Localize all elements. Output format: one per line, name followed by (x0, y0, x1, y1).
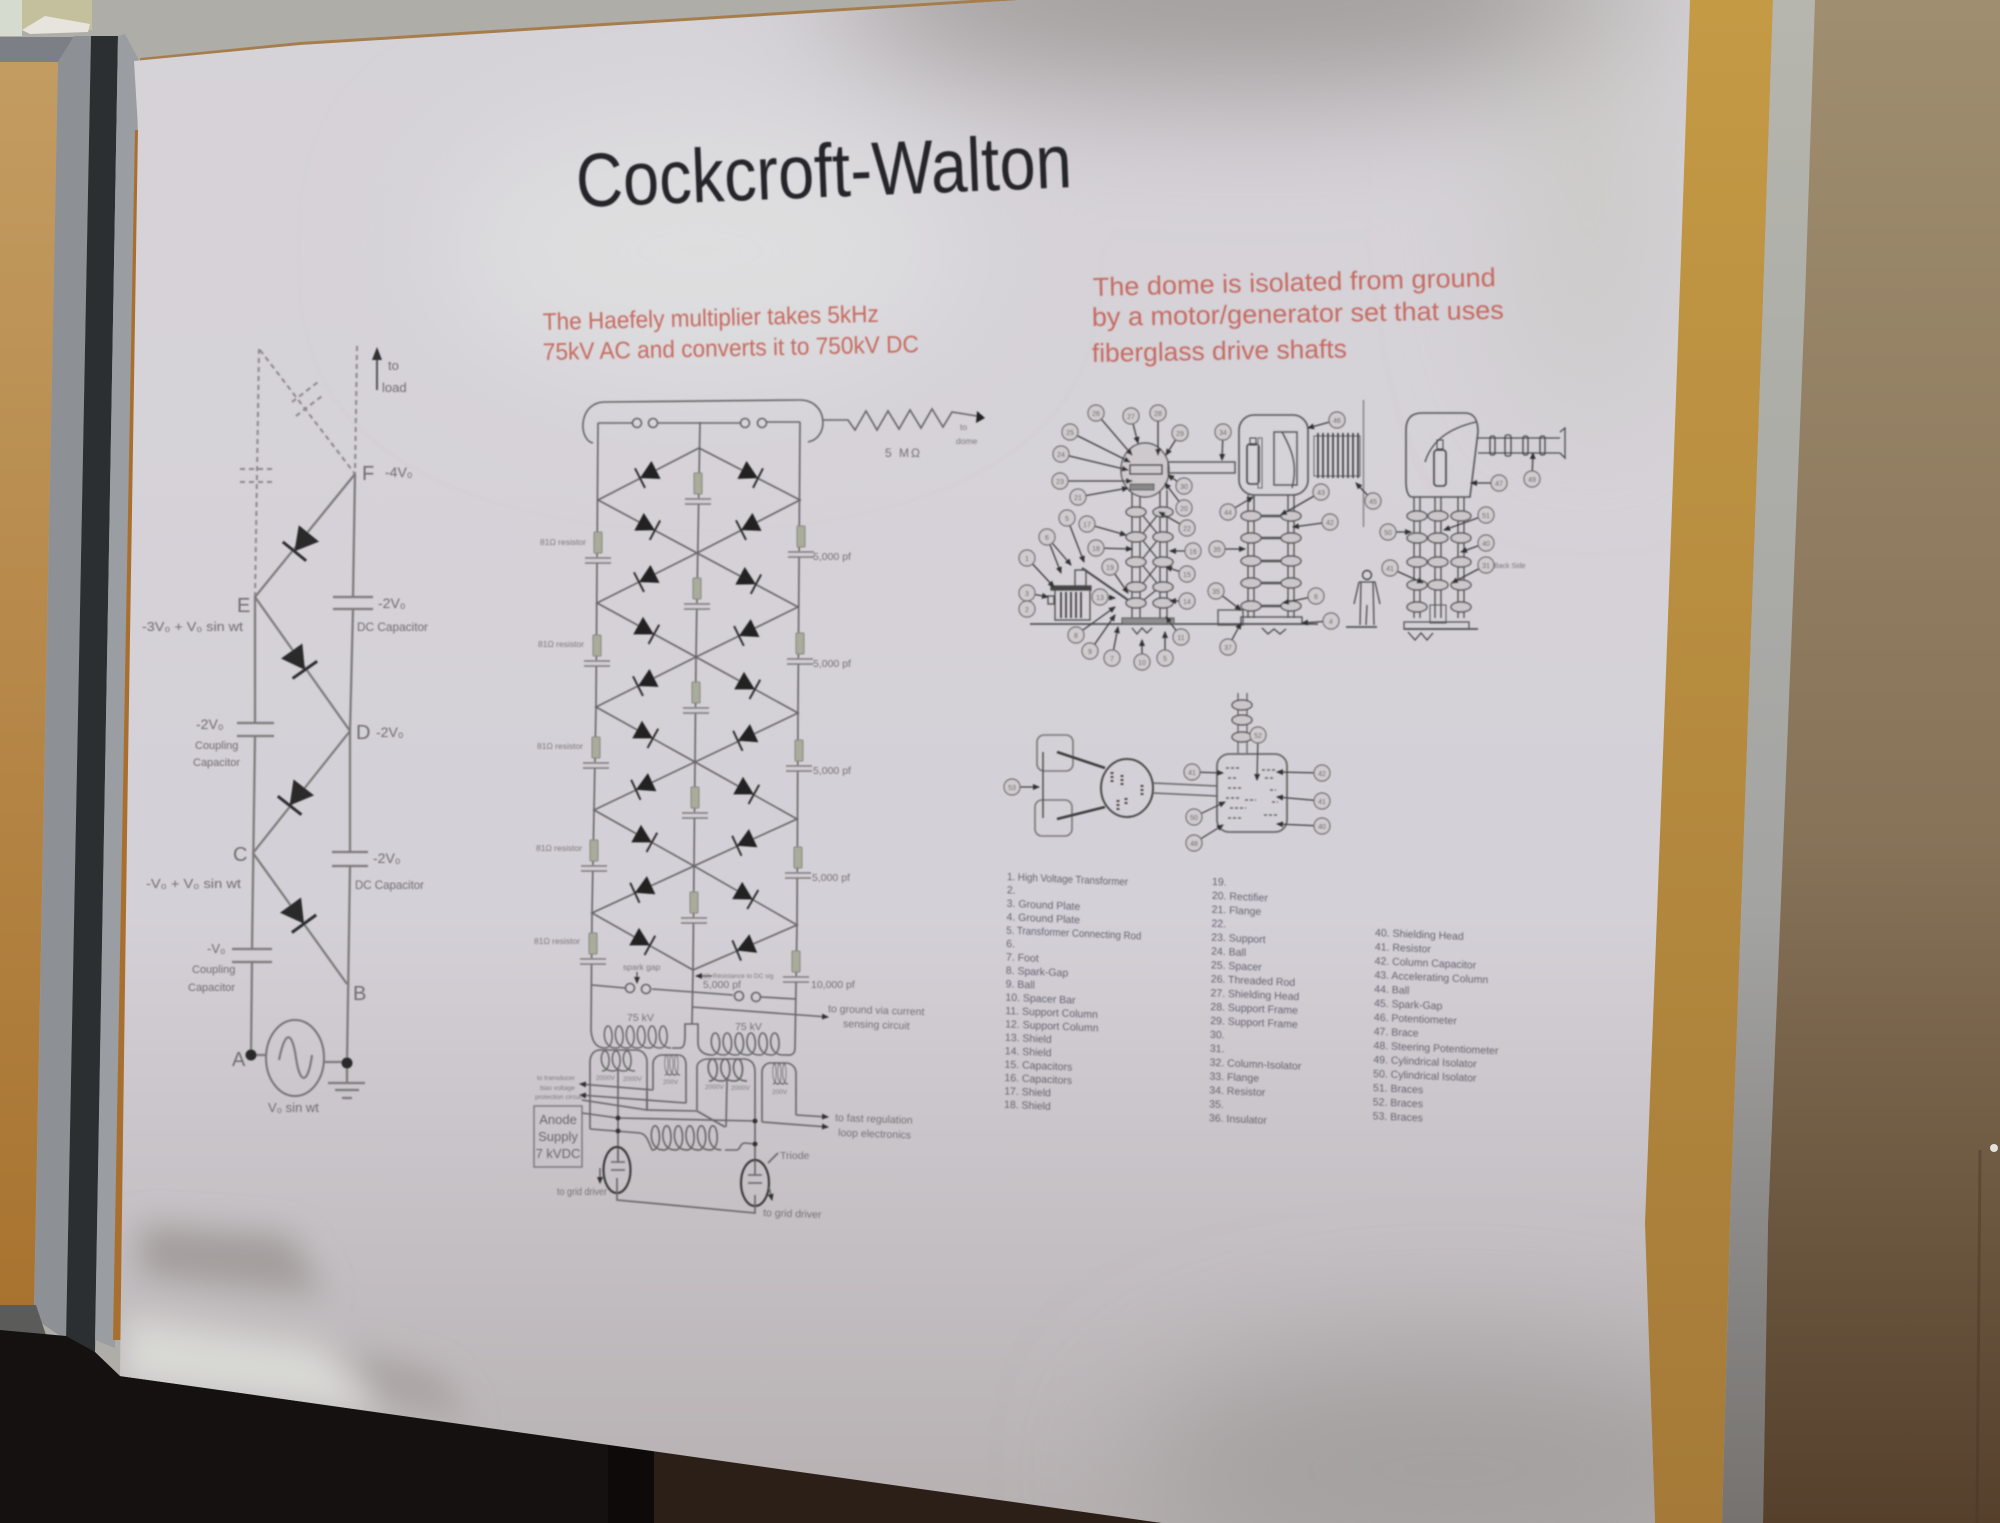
numbered callouts: 47 (1495, 481, 1503, 488)
plan callouts: 53 (1008, 785, 1016, 792)
transformer windings: 2000V (596, 1075, 615, 1082)
spark gap row: (2) Résistance to DC sig (703, 973, 774, 980)
component value labels: 81Ω resistor (538, 639, 584, 649)
spark gap row: 5,000 pf (703, 979, 741, 991)
numbered callouts: 25 (1066, 430, 1074, 437)
dome electrode and output resistor: 5 MΩ (885, 446, 922, 460)
legend: parts list column 2: 30. (1210, 1029, 1225, 1042)
numbered callouts (1019, 405, 1540, 670)
legend: parts list column 2: 19. (1212, 876, 1227, 889)
numbered callouts: 24 (1057, 452, 1065, 459)
legend: parts list column 2: 24. Ball (1211, 946, 1246, 959)
ground sense wire: sensing circuit (843, 1018, 910, 1032)
legend: parts list column 3: 44. Ball (1374, 983, 1409, 997)
numbered callouts: 26 (1092, 411, 1100, 418)
numbered callouts: 35 (1213, 547, 1221, 554)
ladder labels: -2V₀ (376, 724, 404, 740)
right column and dome with insulator: Back Side (1494, 563, 1526, 570)
ladder labels: -V₀ (207, 941, 225, 956)
legend: parts list column 1 (1004, 871, 1142, 1117)
triodes (557, 1147, 822, 1221)
numbered callouts: 5 (1163, 656, 1167, 663)
legend: parts list column 3: 42. Column Capacitor (1375, 955, 1477, 972)
ladder labels: Coupling (195, 740, 238, 752)
dome electrode and output resistor: to (960, 422, 967, 432)
transformer windings: 75 kV (627, 1012, 654, 1024)
ladder labels: DC Capacitor (355, 878, 424, 892)
ladder labels (142, 358, 428, 1115)
ladder labels: B (353, 983, 366, 1005)
numbered callouts: 18 (1092, 546, 1100, 553)
ladder labels: DC Capacitor (357, 620, 428, 634)
legend: parts list column 1: 9. Ball (1006, 978, 1035, 991)
text block: Haefely multiplier note: 75kV AC and converts it to 750kV DC (543, 331, 919, 366)
numbered callouts: 2 (1025, 607, 1029, 614)
component value labels: 81Ω resistor (540, 537, 586, 547)
generator box with column (1217, 693, 1287, 832)
numbered callouts: 45 (1369, 499, 1377, 506)
legend: parts list column 3: 52. Braces (1373, 1096, 1423, 1110)
numbered callouts: 51 (1482, 513, 1490, 520)
numbered callouts: 40 (1482, 541, 1490, 548)
ladder labels: -4V₀ (385, 464, 413, 480)
legend: parts list column 3: 47. Brace (1374, 1026, 1419, 1040)
legend: parts list column 2: 20. Rectifier (1212, 890, 1268, 904)
legend: parts list column 1: 15. Capacitors (1005, 1059, 1072, 1074)
numbered callouts: 27 (1127, 414, 1135, 421)
text block: dome isolation note: by a motor/generator set that uses (1092, 295, 1504, 332)
transformer windings: 2000V (731, 1085, 750, 1092)
middle column and dome (1218, 415, 1308, 634)
legend: parts list column 1: 16. Capacitors (1004, 1072, 1072, 1087)
numbered callouts: 44 (1224, 510, 1232, 517)
numbered callouts: 4 (1329, 619, 1333, 626)
ladder labels: Capacitor (193, 757, 240, 769)
numbered callouts: 14 (1183, 599, 1191, 606)
legend: parts list column 1: 2. (1007, 884, 1016, 897)
component value labels: 5,000 pf (813, 658, 851, 670)
transformer windings: 75 kV (735, 1021, 762, 1033)
plan callouts: 40 (1318, 824, 1326, 831)
legend: parts list column 2: 29. Support Frame (1210, 1015, 1298, 1031)
legend: parts list column 1: 6. (1006, 938, 1015, 950)
numbered callouts: 31 (1482, 563, 1490, 570)
ladder labels: F (362, 463, 374, 485)
ladder labels: Capacitor (188, 982, 235, 994)
diode stack (629, 460, 763, 961)
legend: parts list column 3: 43. Accelerating Column (1374, 969, 1488, 986)
legend: parts list column 3: 53. Braces (1373, 1110, 1423, 1125)
ladder labels: C (233, 844, 247, 866)
legend: parts list column 2: 23. Support (1211, 932, 1266, 946)
numbered callouts: 17 (1083, 522, 1091, 529)
legend: parts list column 2: 26. Threaded Rod (1211, 973, 1295, 989)
rails and cross links (591, 422, 800, 1047)
component value labels: 81Ω resistor (536, 843, 582, 853)
legend: parts list column 2: 22. (1211, 918, 1226, 930)
legend: parts list column 1: 13. Shield (1005, 1032, 1052, 1046)
diodes (278, 524, 321, 933)
text block: dome isolation note: fiberglass drive shafts (1092, 334, 1347, 368)
capacitors (232, 597, 373, 962)
anode supply box: Anode (539, 1112, 577, 1127)
plan callouts: 50 (1190, 815, 1198, 822)
numbered callouts: 49 (1528, 477, 1536, 484)
triodes: to grid driver (763, 1207, 822, 1221)
ground sense wire (692, 1003, 925, 1032)
ladder labels: D (356, 722, 370, 744)
text block: dome isolation note (1092, 262, 1504, 368)
numbered callouts: 46 (1333, 418, 1341, 425)
spark gap row (592, 962, 796, 1002)
numbered callouts: 1 (1025, 556, 1029, 563)
legend: parts list column 2: 21. Flange (1212, 904, 1262, 918)
legend: parts list column 2: 31. (1210, 1043, 1225, 1055)
numbered callouts: 5 (1065, 516, 1069, 523)
legend: parts list column 2: 33. Flange (1209, 1071, 1259, 1085)
legend: parts list column 3: 51. Braces (1373, 1082, 1423, 1096)
numbered callouts: 22 (1183, 526, 1191, 533)
numbered callouts: 13 (1096, 595, 1104, 602)
ladder labels: V₀ sin wt (268, 1100, 319, 1115)
chart: voltage multiplier ladder schematic (142, 346, 428, 1115)
motor boxes and drive (1035, 735, 1217, 836)
bias and regulation wiring: bias voltage (540, 1085, 575, 1092)
plan callouts: 42 (1318, 771, 1326, 778)
plan callouts: 41 (1188, 770, 1196, 777)
legend: parts list column 2: 27. Shielding Head (1211, 987, 1300, 1003)
human figure for scale (1354, 570, 1380, 625)
dome electrode and output resistor: dome (956, 436, 978, 446)
ground sense wire: to ground via current (828, 1003, 925, 1018)
bias and regulation wiring: protection circuit (535, 1094, 583, 1101)
legend: parts list column 1: 8. Spark-Gap (1006, 965, 1068, 980)
legend: parts list column 2: 32. Column-Isolator (1210, 1057, 1302, 1073)
floor lines (1030, 624, 1478, 629)
leader arrows (1027, 413, 1533, 662)
legend: parts list column 3: 46. Potentiometer (1374, 1012, 1457, 1027)
bias and regulation wiring (535, 1075, 913, 1150)
text block: Haefely multiplier note (542, 301, 919, 366)
legend: parts list column 3: 50. Cylindrical Isolator (1373, 1068, 1477, 1085)
numbered callouts: 20 (1180, 506, 1188, 513)
numbered callouts: 34 (1219, 430, 1227, 437)
numbered callouts: 6 (1314, 594, 1318, 601)
numbered callouts: 15 (1183, 572, 1191, 579)
spark gap row: spark gap (623, 962, 661, 972)
AC source and ground (246, 1020, 365, 1098)
dome electrode and output resistor (583, 400, 985, 460)
text block: Haefely multiplier note: The Haefely multiplier takes 5kHz (542, 301, 879, 336)
numbered callouts: 16 (1189, 549, 1197, 556)
legend: parts list column 2: 34. Resistor (1209, 1085, 1266, 1099)
legend: parts list column 3: 45. Spark-Gap (1374, 998, 1443, 1013)
legend: parts list column 1: 1. High Voltage Transformer (1007, 871, 1129, 888)
bias and regulation wiring: loop electronics (838, 1127, 911, 1142)
diagram: accelerator cutaway elevations (1019, 400, 1565, 670)
arrow: to load (372, 347, 382, 390)
ladder labels: -2V₀ (378, 595, 406, 611)
legend: parts list column 2 (1209, 876, 1304, 1128)
finned drive shaft (1314, 400, 1364, 527)
numbered callouts: 35 (1212, 589, 1220, 596)
resistor-capacitor pairs (580, 473, 814, 982)
legend: parts list column 2: 25. Spacer (1211, 959, 1262, 974)
numbered callouts: 28 (1154, 411, 1162, 418)
component value labels: 5,000 pf (813, 765, 851, 777)
legend: parts list column 1: 11. Support Column (1005, 1005, 1098, 1021)
dashed next stage (240, 346, 357, 597)
numbered callouts: 30 (1180, 484, 1188, 491)
anode supply box: 7 kVDC (536, 1146, 580, 1161)
component value labels: 5,000 pf (812, 872, 850, 884)
numbered callouts: 23 (1056, 479, 1064, 486)
numbered callouts: 11 (1177, 635, 1185, 642)
transformer windings: 2000V (623, 1076, 642, 1083)
legend: parts list column 1: 7. Foot (1006, 951, 1039, 965)
plan callouts: 48 (1190, 841, 1198, 848)
anode supply box (534, 1106, 582, 1167)
component value labels: 5,000 pf (813, 551, 851, 563)
legend: parts list column 1: 12. Support Column (1005, 1018, 1099, 1035)
plan callouts: 52 (1254, 733, 1262, 740)
transformer windings: 2000V (705, 1084, 724, 1091)
legend: parts list column 2: 35. (1209, 1098, 1224, 1111)
legend: parts list column 2: 28. Support Frame (1210, 1001, 1298, 1017)
numbered callouts: 3 (1025, 591, 1029, 598)
ladder labels: E (237, 595, 250, 617)
transformer windings (590, 1012, 796, 1160)
legend: parts list column 1: 4. Ground Plate (1006, 911, 1080, 926)
numbered callouts: 41 (1386, 566, 1394, 573)
numbered callouts: 50 (1384, 530, 1392, 537)
ladder labels: -2V₀ (196, 716, 224, 732)
numbered callouts: 7 (1110, 656, 1114, 663)
legend: parts list column 3: 48. Steering Potentiometer (1373, 1040, 1499, 1057)
bias and regulation wiring: to fast regulation (835, 1112, 913, 1127)
component value labels: 81Ω resistor (534, 936, 580, 946)
ladder labels: to (388, 358, 399, 373)
legend: parts list column 1: 18. Shield (1004, 1099, 1051, 1113)
component value labels: 10,000 pf (811, 979, 855, 991)
legend: parts list column 1: 3. Ground Plate (1007, 898, 1080, 913)
triodes: Triode (780, 1150, 810, 1162)
plan callouts (1004, 727, 1330, 851)
front column and high-voltage head (1121, 443, 1235, 634)
numbered callouts: 9 (1088, 649, 1092, 656)
transformer windings: 200V (663, 1079, 679, 1086)
text block: dome isolation note: The dome is isolated from ground (1092, 262, 1496, 302)
numbered callouts: 19 (1106, 565, 1114, 572)
numbered callouts: 43 (1317, 490, 1325, 497)
numbered callouts: 42 (1326, 520, 1334, 527)
ladder labels: -V₀ + V₀ sin wt (146, 876, 241, 891)
title: Cockcroft-Walton (574, 119, 1073, 224)
ladder labels: -3V₀ + V₀ sin wt (142, 619, 243, 634)
legend: parts list column 1: 14. Shield (1005, 1045, 1052, 1059)
ladder labels: Coupling (192, 964, 235, 976)
numbered callouts: 8 (1074, 633, 1078, 640)
legend: parts list column 3 (1373, 927, 1500, 1128)
legend: parts list column 3: 41. Resistor (1375, 941, 1431, 956)
numbered callouts: 21 (1074, 495, 1082, 502)
component value labels (534, 537, 855, 991)
legend: parts list column 3: 40. Shielding Head (1375, 927, 1464, 943)
legend: parts list column 1: 10. Spacer Bar (1005, 992, 1076, 1007)
numbered callouts: 6 (1045, 535, 1049, 542)
ladder labels: A (232, 1049, 246, 1071)
ladder wires (251, 474, 355, 1063)
component value labels: 81Ω resistor (537, 741, 583, 751)
chart: Haefely multiplier schematic (534, 400, 985, 1221)
numbered callouts: 10 (1138, 660, 1146, 667)
diagram: motor/generator plan view (1004, 693, 1330, 851)
ladder labels: load (382, 380, 407, 395)
right column and dome with insulator (1404, 413, 1565, 640)
legend: parts list column 2: 36. Insulator (1209, 1112, 1267, 1127)
legend: parts list column 3: 49. Cylindrical Isolator (1373, 1054, 1477, 1070)
legend: parts list column 1: 5. Transformer Connecting Rod (1006, 925, 1142, 943)
plan callouts: 41 (1318, 799, 1326, 806)
bias and regulation wiring: to transducer (537, 1075, 576, 1082)
numbered callouts: 29 (1176, 431, 1184, 438)
legend: parts list column 1: 17. Shield (1004, 1085, 1051, 1099)
anode supply box: Supply (538, 1129, 578, 1144)
transformer (1048, 568, 1128, 620)
transformer windings: 200V (772, 1089, 788, 1096)
ladder labels: -2V₀ (373, 850, 401, 866)
numbered callouts: 37 (1224, 645, 1232, 652)
triodes: to grid driver (557, 1186, 607, 1198)
